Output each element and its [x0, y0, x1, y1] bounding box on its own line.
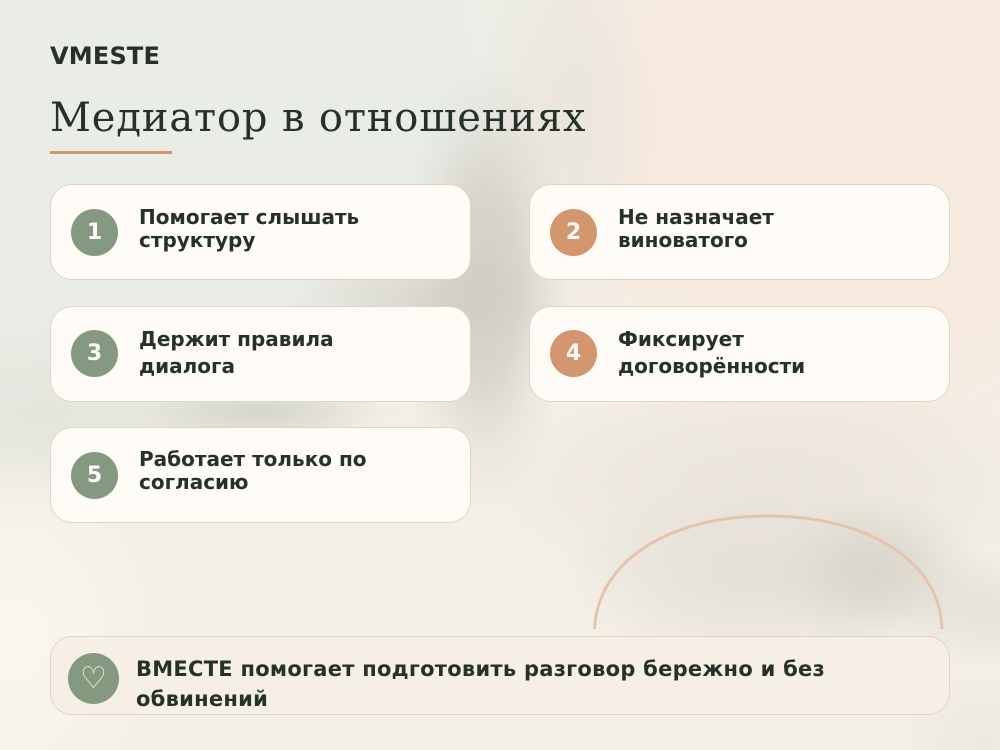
number 2 [550, 209, 597, 256]
number 3 [71, 330, 118, 377]
callout text: ВМЕСТЕ помогает подготовить разговор бережно и без [136, 657, 825, 681]
number 2: 2 [566, 220, 581, 245]
card 2 [529, 184, 950, 280]
callout text [136, 657, 825, 711]
card 1 text: Помогает слышать [139, 205, 359, 229]
brand name: VMESTE [50, 42, 160, 70]
card 3 text [139, 327, 334, 378]
number 4 [550, 330, 597, 377]
icon: heart: ♡ [80, 661, 107, 696]
card 5 text: Работает только по [139, 447, 367, 471]
card 5 text: согласию [139, 470, 249, 494]
title: Медиатор в отношениях [50, 95, 586, 141]
card 2 text [618, 205, 774, 252]
card 3 [50, 306, 471, 402]
number 4: 4 [566, 341, 581, 366]
number 1: 1 [87, 220, 102, 245]
title underline [50, 151, 172, 154]
number 3: 3 [87, 341, 102, 366]
card 5 text [139, 447, 367, 494]
card 4 text: Фиксирует [618, 327, 744, 351]
number 1 [71, 209, 118, 256]
card 3 text: Держит правила [139, 327, 334, 351]
card 3 text: диалога [139, 354, 235, 378]
card 1 [50, 184, 471, 280]
card 1 text [139, 205, 359, 252]
number 5: 5 [87, 463, 102, 488]
card 4 text: договорённости [618, 354, 805, 378]
card 4 [529, 306, 950, 402]
footer callout [50, 636, 950, 715]
number 5 [71, 452, 118, 499]
card 4 text [618, 327, 805, 378]
card 1 text: структуру [139, 228, 255, 252]
decorative arc [593, 514, 944, 630]
card 2 text: виноватого [618, 228, 748, 252]
card 2 text: Не назначает [618, 205, 774, 229]
card 5 [50, 427, 471, 523]
callout text: обвинений [136, 687, 268, 711]
icon: heart [68, 653, 119, 704]
